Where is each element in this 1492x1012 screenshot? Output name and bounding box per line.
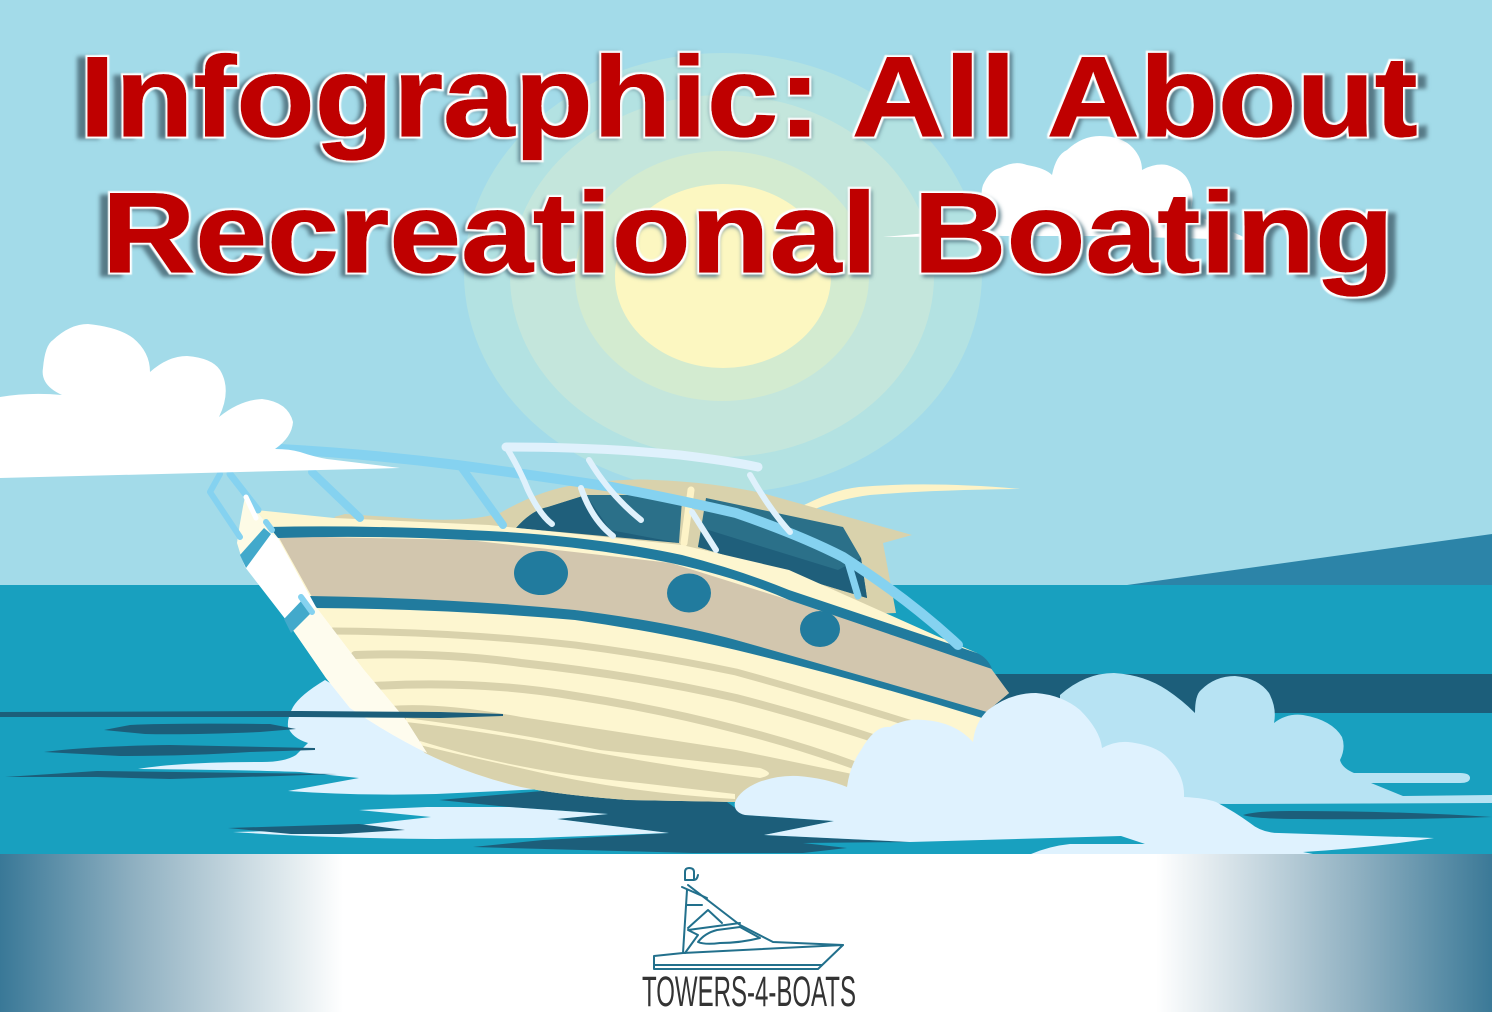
- upper trim band: [268, 526, 992, 669]
- white bow: [237, 497, 427, 753]
- cloud: upper right: [883, 136, 1250, 240]
- distant hill: [1120, 534, 1492, 586]
- front wave foam: [735, 693, 1434, 854]
- cloud: left: [0, 324, 400, 478]
- bow tip highlight: [246, 497, 256, 518]
- sun with halo rings: [464, 53, 982, 493]
- dark water band: [990, 674, 1492, 713]
- footer band: [0, 854, 1492, 1012]
- back wave foam: [1060, 673, 1492, 804]
- hull tan side panel: [278, 536, 1009, 713]
- left wake foam: [138, 680, 640, 795]
- water streak right: [1243, 811, 1492, 819]
- logo: Towers-4-Boats: [642, 868, 856, 1012]
- title: [70, 34, 1427, 301]
- hull highlight streaks: [406, 718, 769, 799]
- lower wake foam: [233, 807, 669, 839]
- title shadow: [70, 34, 1427, 301]
- water streaks left: [5, 724, 405, 834]
- sea: [0, 585, 1492, 855]
- portholes: [514, 551, 840, 647]
- sky background: [0, 0, 1492, 586]
- hull lower cream section: [256, 510, 1009, 802]
- title text: Infographic: All About: [80, 34, 1418, 161]
- hull bottom shading: [390, 705, 862, 802]
- cabin superstructure: [334, 480, 912, 620]
- title text: Recreational Boating: [102, 170, 1394, 297]
- title text: [80, 34, 1418, 297]
- lower trim band: [310, 596, 987, 718]
- cream windshield post: [684, 490, 691, 543]
- title shadow: Recreational Boating: [93, 172, 1403, 301]
- dark water beneath hull: [439, 789, 910, 853]
- long water streak across hull: [0, 711, 503, 718]
- antenna / mast: [789, 484, 1020, 518]
- windshield frame: [506, 447, 790, 550]
- cabin windows: [516, 495, 867, 598]
- logo boat icon: [654, 868, 843, 969]
- deck railing: [210, 449, 958, 645]
- hull stripes: [333, 631, 925, 768]
- bow trim bands: [240, 528, 312, 633]
- boat: [210, 447, 1009, 802]
- title shadow: Infographic: All About: [70, 34, 1427, 163]
